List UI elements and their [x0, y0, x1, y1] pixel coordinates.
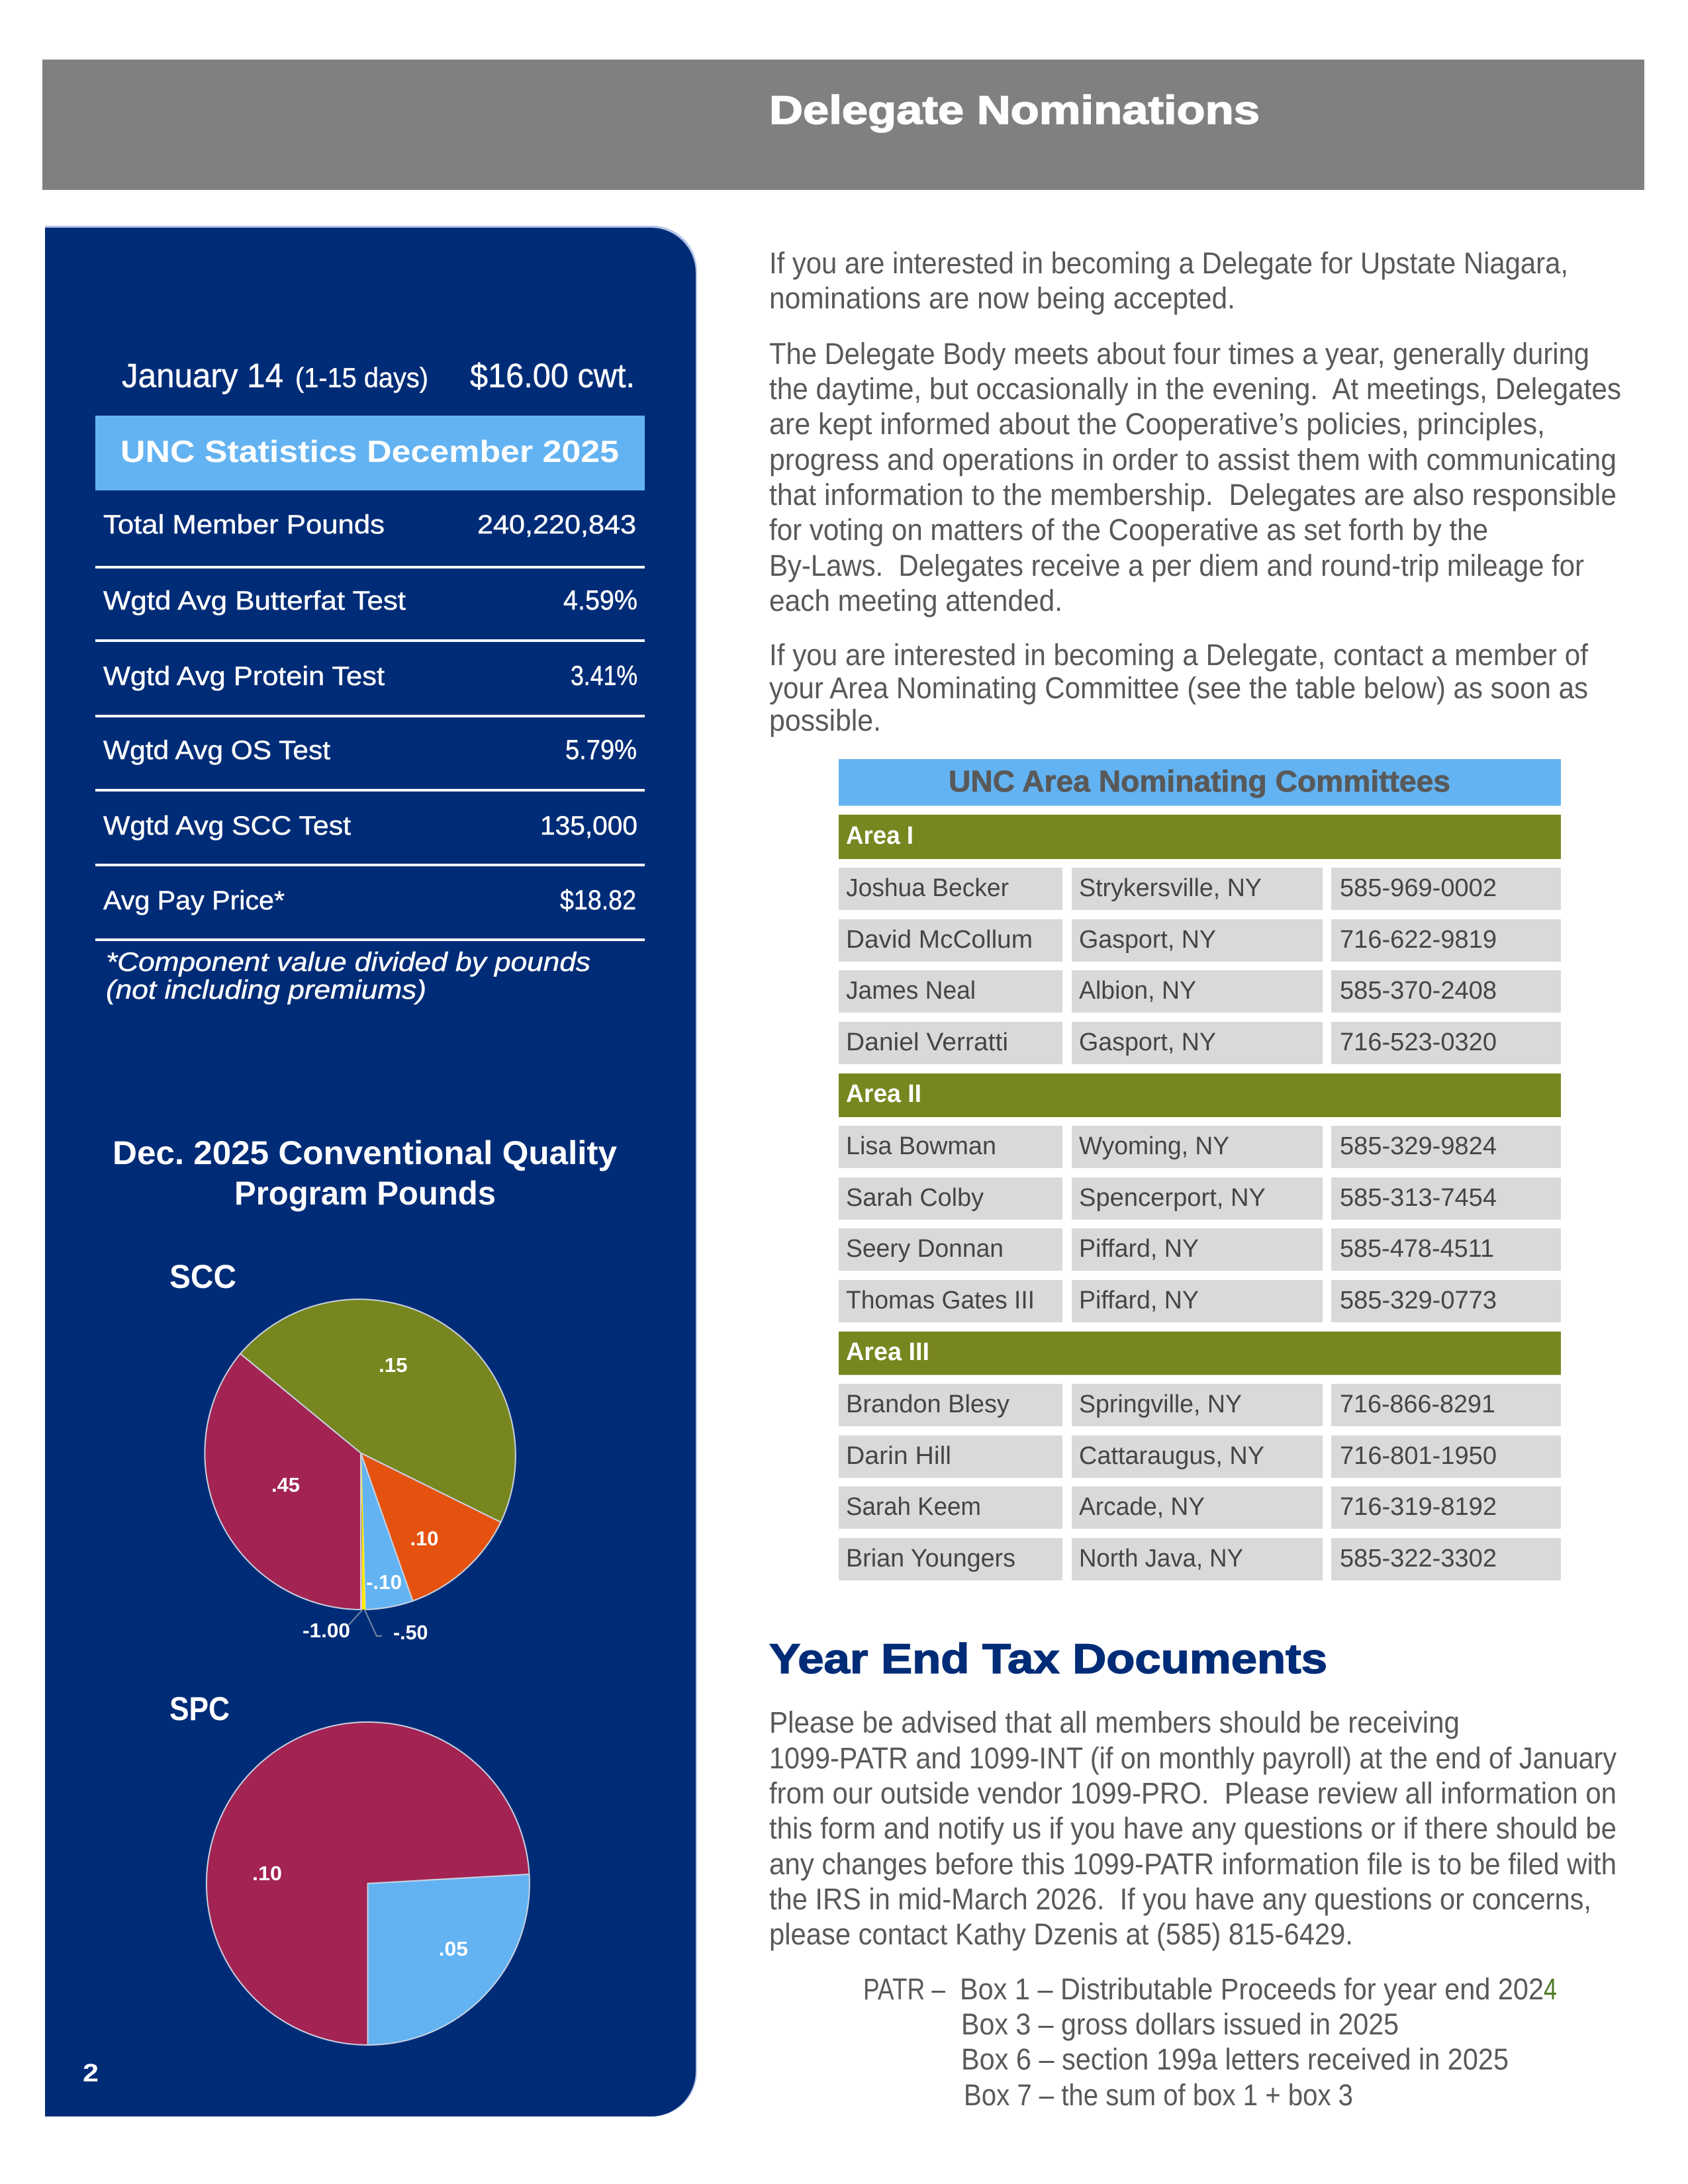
- pay price line: $16.00 cwt.: [470, 357, 635, 394]
- table: UNC Area Nominating Committees: [839, 759, 1561, 1580]
- pie chart: SCC: -.50: [393, 1621, 428, 1644]
- Area II section: Piffard, NY: [1079, 1235, 1199, 1263]
- text block: delegate intro: nominations are now being accepted.: [769, 281, 1235, 315]
- text block: how to apply: [769, 638, 1588, 737]
- pie chart: SCC: .10: [410, 1527, 438, 1550]
- table heading: UNC Area Nominating Committees: [949, 764, 1450, 798]
- Area I section: Area I: [846, 822, 914, 850]
- pie chart: SPC: .05: [439, 1937, 468, 1960]
- text block: delegate body description: the daytime, but occasionally in the evening. At meetings, Delegates: [769, 372, 1621, 406]
- Area III section: 716-801-1950: [1340, 1442, 1497, 1470]
- table heading: [839, 759, 1561, 806]
- text block: delegate body description: By-Laws. Delegates receive a per diem and round-trip mileage for: [769, 549, 1584, 582]
- pay price line: [122, 357, 635, 394]
- statistics table: Wgtd Avg Protein Test: [103, 662, 385, 691]
- text block: delegate body description: are kept informed about the Cooperative’s policies, principles,: [769, 407, 1545, 441]
- footnote: (not including premiums): [106, 976, 426, 1005]
- SCC chart title: SCC: [169, 1258, 236, 1295]
- pay price line: January 14: [122, 357, 283, 394]
- Area II section: Thomas Gates III: [846, 1287, 1035, 1314]
- Area II section: 585-329-0773: [1340, 1287, 1497, 1314]
- page number: 2: [83, 2060, 99, 2087]
- text block: delegate intro: If you are interested in becoming a Delegate for Upstate Niagara,: [769, 246, 1568, 280]
- Area II section: Wyoming, NY: [1079, 1132, 1229, 1160]
- Area III section: Darin Hill: [846, 1442, 951, 1470]
- Area III section: North Java, NY: [1079, 1545, 1243, 1572]
- statistics table: 4.59%: [563, 584, 637, 615]
- Area III section: Sarah Keem: [846, 1493, 981, 1521]
- statistics table: Wgtd Avg SCC Test: [103, 811, 351, 841]
- text block: how to apply: If you are interested in becoming a Delegate, contact a member of: [769, 638, 1588, 672]
- statistics table: $18.82: [560, 884, 636, 915]
- pie chart: SPC: .10: [252, 1862, 282, 1885]
- Area II section: Lisa Bowman: [846, 1132, 996, 1160]
- text block: tax documents: Please be advised that all members should be receiving: [769, 1706, 1460, 1739]
- panel: statistics sidebar: [45, 226, 697, 2116]
- Area II section: 585-313-7454: [1340, 1184, 1497, 1212]
- text block: PATR box list: Box 1 – Distributable Proceeds for year end 202: [960, 1972, 1544, 2006]
- Area II section: Seery Donnan: [846, 1235, 1004, 1263]
- Area III section: Springville, NY: [1079, 1390, 1242, 1418]
- text block: tax documents: any changes before this 1099-PATR information file is to be filed with: [769, 1847, 1617, 1881]
- text block: PATR box list: 4: [1544, 1972, 1557, 2006]
- statistics heading bar: [95, 416, 645, 490]
- text block: delegate body description: The Delegate Body meets about four times a year, generally during: [769, 337, 1589, 371]
- Area II section: Area II: [846, 1080, 921, 1108]
- text block: delegate body description: that information to the membership. Delegates are also responsible: [769, 478, 1617, 512]
- statistics table: Wgtd Avg Butterfat Test: [103, 586, 406, 615]
- Area II section: Spencerport, NY: [1079, 1184, 1266, 1212]
- Area I section: James Neal: [846, 977, 976, 1005]
- Area II section: Piffard, NY: [1079, 1287, 1199, 1314]
- Area II section: Sarah Colby: [846, 1184, 984, 1212]
- Area I section: 716-622-9819: [1340, 926, 1497, 954]
- chart heading: Program Pounds: [234, 1175, 496, 1212]
- Area I section: Albion, NY: [1079, 977, 1196, 1005]
- text block: delegate body description: for voting on matters of the Cooperative as set forth by the: [769, 513, 1488, 547]
- Area I section: [839, 815, 1561, 1064]
- text block: PATR box list: [863, 1972, 1557, 2112]
- statistics table: Total Member Pounds: [103, 510, 385, 539]
- Area I section: Joshua Becker: [846, 874, 1009, 902]
- statistics table: 135,000: [540, 811, 637, 841]
- Area III section: Brandon Blesy: [846, 1390, 1009, 1418]
- statistics table: 240,220,843: [477, 510, 636, 539]
- text block: tax documents: the IRS in mid-March 2026. If you have any questions or concerns,: [769, 1882, 1591, 1916]
- chart heading: [113, 1134, 617, 1212]
- Area I section: Gasport, NY: [1079, 926, 1216, 954]
- pie chart: SCC: .45: [271, 1473, 300, 1496]
- statistics table: Avg Pay Price*: [103, 886, 285, 915]
- SPC chart title: SPC: [169, 1690, 230, 1727]
- text block: delegate body description: [769, 337, 1621, 617]
- statistics table: Wgtd Avg OS Test: [103, 736, 330, 765]
- pie chart: SCC: -1.00: [303, 1619, 350, 1642]
- Area III section: 716-866-8291: [1340, 1390, 1495, 1418]
- text block: tax documents: please contact Kathy Dzenis at (585) 815-6429.: [769, 1917, 1353, 1951]
- text block: how to apply: possible.: [769, 704, 881, 737]
- Area III section: Area III: [846, 1338, 929, 1366]
- Area III section: Arcade, NY: [1079, 1493, 1205, 1521]
- pie chart: SCC: [205, 1299, 516, 1644]
- text block: tax documents: this form and notify us if you have any questions or if there should be: [769, 1811, 1617, 1845]
- Area I section: 585-370-2408: [1340, 977, 1497, 1005]
- text block: PATR box list: Box 3 – gross dollars issued in 2025: [961, 2007, 1399, 2041]
- statistics table: [95, 510, 645, 941]
- Area I section: Strykersville, NY: [1079, 874, 1262, 902]
- Area III section: Brian Youngers: [846, 1545, 1015, 1572]
- header banner: Delegate Nominations: [42, 60, 1644, 190]
- Area I section: David McCollum: [846, 926, 1033, 954]
- text block: tax documents: from our outside vendor 1099-PRO. Please review all information on: [769, 1776, 1617, 1810]
- Area I section: 716-523-0320: [1340, 1028, 1497, 1056]
- Area II section: 585-329-9824: [1340, 1132, 1497, 1160]
- heading: Year End Tax Documents: Year End Tax Documents: [769, 1636, 1327, 1682]
- statistics table: 5.79%: [565, 734, 637, 765]
- Area II section: [839, 1073, 1561, 1322]
- Area III section: 716-319-8192: [1340, 1493, 1497, 1521]
- text block: PATR box list: Box 7 – the sum of box 1 + box 3: [964, 2078, 1353, 2112]
- Area I section: 585-969-0002: [1340, 874, 1497, 902]
- pie chart: SCC: .15: [379, 1353, 408, 1377]
- Area III section: 585-322-3302: [1340, 1545, 1497, 1572]
- Area I section: Gasport, NY: [1079, 1028, 1216, 1056]
- pay price line: (1-15 days): [295, 362, 428, 393]
- pie chart: SCC: -.10: [366, 1570, 402, 1594]
- text block: how to apply: your Area Nominating Committee (see the table below) as soon as: [769, 671, 1588, 705]
- footnote: *Component value divided by pounds: [106, 948, 590, 977]
- statistics heading bar: UNC Statistics December 2025: [120, 434, 619, 469]
- Area II section: 585-478-4511: [1340, 1235, 1494, 1263]
- chart heading: Dec. 2025 Conventional Quality: [113, 1134, 617, 1171]
- Area III section: Cattaraugus, NY: [1079, 1442, 1264, 1470]
- text block: delegate body description: progress and operations in order to assist them with communicating: [769, 443, 1617, 477]
- text block: tax documents: 1099-PATR and 1099-INT (if on monthly payroll) at the end of January: [769, 1741, 1617, 1775]
- Area I section: Daniel Verratti: [846, 1028, 1008, 1056]
- text block: PATR box list: Box 6 – section 199a letters received in 2025: [961, 2042, 1509, 2076]
- text block: delegate intro: [769, 246, 1568, 315]
- header banner: Delegate Nominations: Delegate Nominations: [769, 88, 1260, 132]
- Area III section: [839, 1332, 1561, 1580]
- footnote: [106, 948, 590, 1005]
- text block: delegate body description: each meeting attended.: [769, 584, 1062, 617]
- text block: PATR box list: PATR –: [863, 1972, 945, 2006]
- text block: tax documents: [769, 1706, 1617, 1951]
- pie chart: SPC: [207, 1722, 530, 2045]
- statistics table: 3.41%: [571, 660, 637, 691]
